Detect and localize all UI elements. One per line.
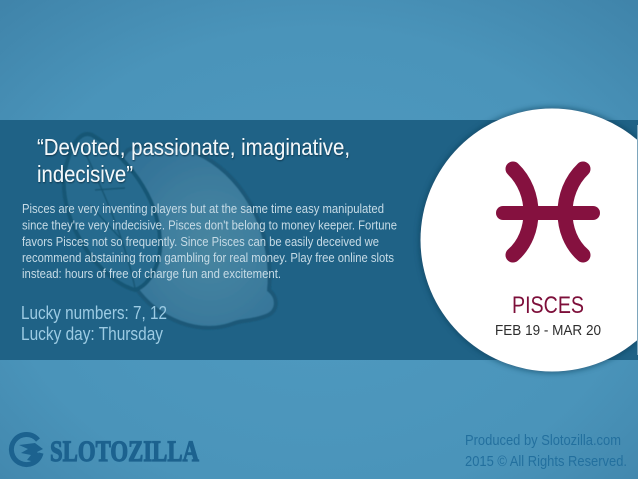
- quote heading: “Devoted, passionate, imaginative,: [37, 134, 350, 160]
- dark band: [0, 120, 638, 360]
- quote heading: [37, 134, 350, 187]
- body text: instead: hours of free of charge fun and excitement.: [22, 267, 281, 281]
- logo: slotozilla: [11, 435, 199, 468]
- lucky numbers and day: Lucky numbers: 7, 12: [21, 303, 167, 323]
- icon: dragon coin: [11, 435, 43, 465]
- white circle: [420, 108, 638, 372]
- body text: recommend abstaining from gambling for real money. Play free online slots: [22, 251, 394, 265]
- body text: since they're very indecisive. Pisces don't belong to money keeper. Fortune: [22, 218, 397, 232]
- quote heading: indecisive”: [37, 161, 133, 187]
- wordmark: SLOTOZILLA: [50, 435, 199, 468]
- right edge sliver: [637, 125, 638, 355]
- lucky numbers and day: Lucky day: Thursday: [21, 324, 163, 344]
- icon: lemon watermark: [64, 134, 276, 328]
- lucky numbers and day: [21, 303, 167, 344]
- body text: Pisces are very inventing players but at the same time easy manipulated: [22, 202, 384, 216]
- icon: pisces symbol: [503, 169, 593, 255]
- body text: [22, 202, 397, 281]
- circle shadow: [419, 107, 638, 373]
- body text: favors Pisces not so frequently. Since Pisces can be easily deceived we: [22, 235, 379, 249]
- sign name: PISCES: [512, 292, 584, 319]
- credits: [465, 432, 627, 470]
- sign dates: FEB 19 - MAR 20: [495, 323, 601, 339]
